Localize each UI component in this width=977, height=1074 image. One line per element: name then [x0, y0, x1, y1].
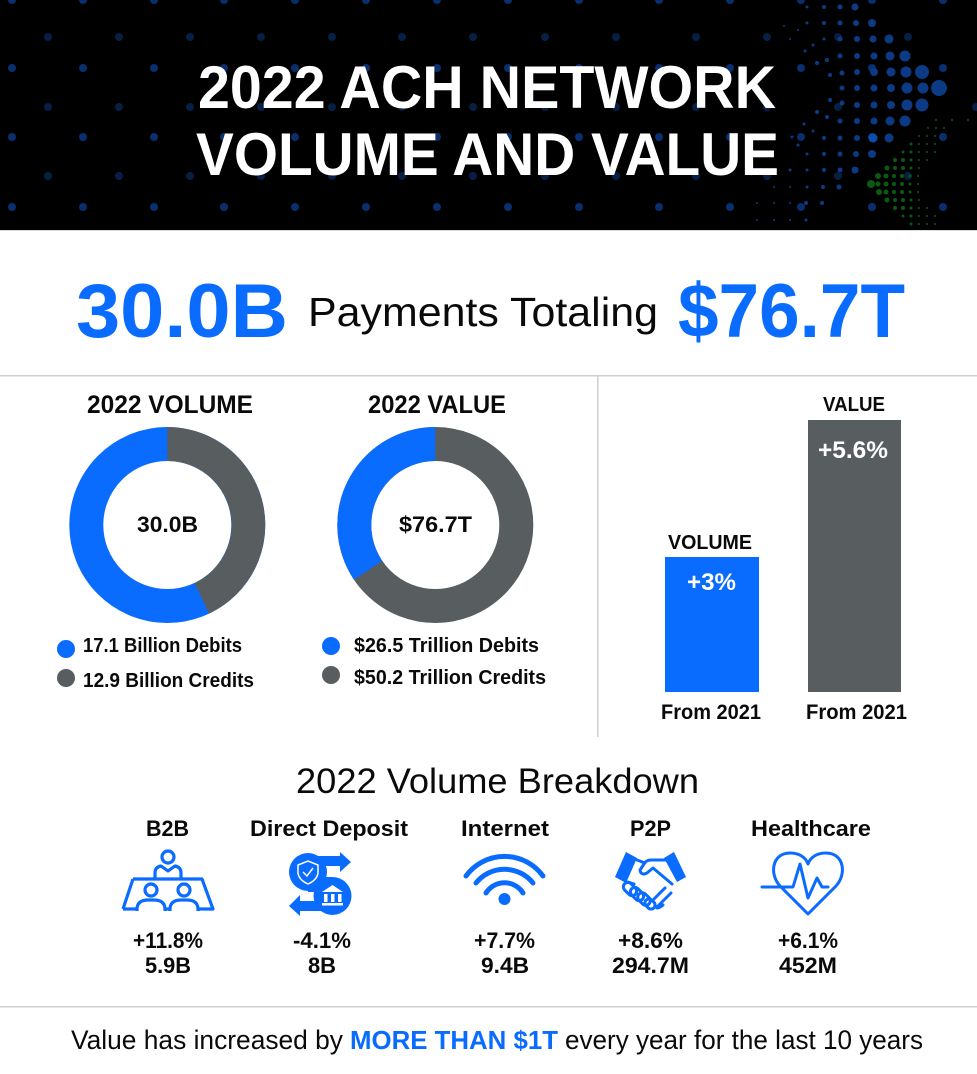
bar: volume	[661, 532, 761, 724]
title: VOLUME AND VALUE	[196, 121, 779, 188]
column: B2B: +11.8%	[133, 928, 203, 953]
column: Internet: 9.4B	[481, 953, 529, 978]
column: Internet: Internet	[461, 816, 550, 841]
headline statistic: 30.0B	[76, 269, 288, 354]
headline statistic: Payments Totaling	[308, 289, 658, 335]
bar: value: +5.6%	[818, 437, 888, 464]
legend: volume: 17.1 Billion Debits	[83, 635, 242, 657]
legend: volume	[57, 635, 254, 692]
bar: volume: From 2021	[661, 701, 761, 724]
header banner	[0, 0, 977, 231]
bar: volume: +3%	[687, 569, 736, 596]
column: Internet: +7.7%	[474, 928, 535, 953]
column: Healthcare: 452M	[779, 953, 837, 978]
legend: volume: 12.9 Billion Credits	[83, 670, 254, 692]
panel: 2022 volume donut	[57, 391, 265, 692]
column: P2P: P2P	[630, 816, 671, 841]
bar: value	[806, 394, 907, 724]
column: Direct Deposit	[250, 816, 409, 978]
headline statistic: $76.7T	[678, 269, 905, 354]
donut chart: value	[337, 427, 516, 606]
heading: volume breakdown: 2022 Volume Breakdown	[296, 762, 699, 801]
column: B2B: B2B	[146, 816, 189, 841]
bar: value: From 2021	[806, 701, 907, 724]
footer statement: Value has increased by	[71, 1025, 343, 1055]
heading: 2022 volume: 2022 VOLUME	[87, 391, 253, 419]
legend: value	[322, 635, 546, 689]
panel: growth bar chart	[661, 394, 907, 724]
legend: value: $26.5 Trillion Debits	[354, 635, 539, 657]
bar: value: VALUE	[823, 394, 885, 416]
icon: heart pulse	[762, 853, 842, 914]
footer statement: MORE THAN $1T	[350, 1025, 558, 1055]
column: Internet	[461, 816, 550, 978]
donut chart: value: $76.7T	[399, 512, 473, 537]
column: Healthcare: +6.1%	[778, 928, 838, 953]
column: P2P: +8.6%	[618, 928, 683, 953]
column: Direct Deposit: 8B	[308, 953, 336, 978]
donut chart: volume	[86, 427, 265, 614]
column: Healthcare	[751, 816, 871, 978]
column: P2P: 294.7M	[612, 953, 689, 978]
panel: 2022 value donut	[322, 391, 546, 689]
column: Healthcare: Healthcare	[751, 816, 871, 841]
icon: wifi	[466, 856, 543, 905]
column: B2B	[123, 816, 213, 978]
heading: 2022 value: 2022 VALUE	[368, 391, 506, 419]
column: P2P	[612, 816, 689, 978]
title: 2022 ACH NETWORK	[198, 54, 776, 121]
icon: money transfer	[289, 852, 352, 916]
footer statement: every year for the last 10 years	[565, 1025, 923, 1055]
legend: value: $50.2 Trillion Credits	[354, 667, 546, 689]
icon: handshake	[615, 852, 686, 911]
title	[196, 54, 779, 188]
column: Direct Deposit: Direct Deposit	[250, 816, 409, 841]
footer statement	[71, 1025, 923, 1055]
column: B2B: 5.9B	[145, 953, 191, 978]
icon: meeting table	[123, 851, 213, 911]
column: Direct Deposit: -4.1%	[293, 928, 351, 953]
bar: volume: VOLUME	[668, 532, 752, 554]
donut chart: volume: 30.0B	[137, 512, 198, 537]
headline statistic	[76, 269, 905, 354]
